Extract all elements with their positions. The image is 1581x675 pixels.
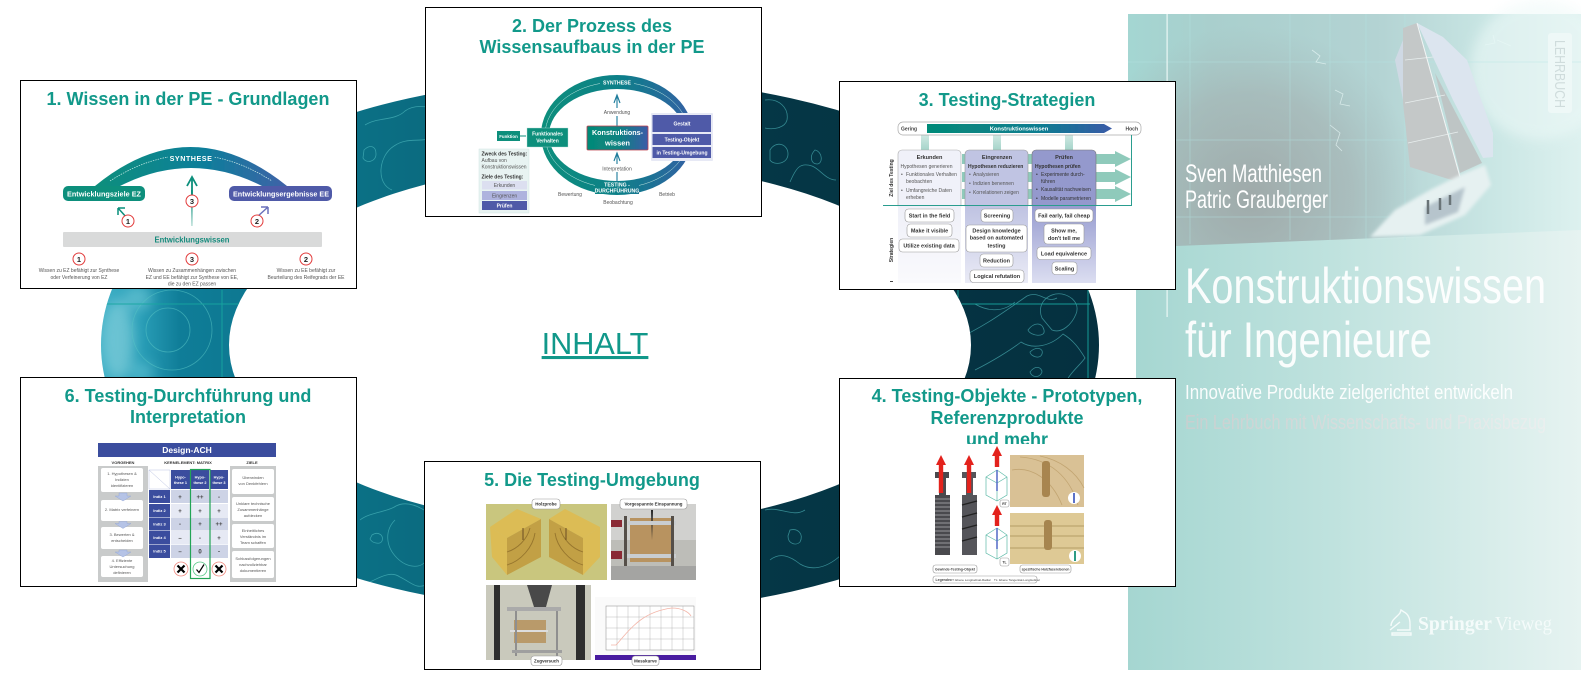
strategy pills: Make it visible (911, 228, 948, 234)
column: Prüfen: Kausalität nachweisen (1041, 187, 1091, 193)
vertical arrows (614, 95, 620, 182)
hypothesis matrix: + (178, 509, 182, 515)
left column: procedure: 2. Matrix verfeinern (105, 507, 139, 512)
right column: goals (230, 466, 276, 582)
explanatory text: oder Verfeinerung von EZ (51, 275, 107, 281)
photo: measurement curve (595, 597, 696, 660)
publisher logo (1390, 610, 1552, 635)
left column: procedure: entscheiden (111, 538, 133, 543)
column: Prüfen: • (1036, 187, 1038, 193)
box: Funktion: Funktion (499, 134, 518, 139)
panel 5: Testing-Umgebung (424, 462, 760, 670)
publisher logo: Springer (1418, 613, 1492, 635)
heading 2: 2. Der Prozess des (512, 16, 672, 36)
column: Erkunden: beobachten (906, 179, 932, 185)
book cover (1128, 0, 1581, 670)
heading 4: 4. Testing-Objekte - Prototypen, (872, 386, 1142, 406)
box: Konstruktionswissen: wissen (604, 138, 630, 148)
box EZ (63, 186, 145, 201)
strategy pills: Show me, (1051, 228, 1077, 234)
left column: procedure: 1. Hypothesen & (107, 471, 137, 476)
strategy pills: Utilize existing data (903, 244, 956, 250)
hypothesis matrix: - (218, 550, 220, 556)
legend: Prüfen (497, 204, 512, 210)
photo captions: Holzprobe (535, 502, 557, 506)
photos (486, 499, 696, 666)
image captions: RT: Ebene Longitudinal-Radial (950, 578, 991, 582)
authors: Sven Matthiesen (1185, 160, 1322, 188)
photo captions: Messkurve (634, 658, 657, 664)
column headers: ZIELE (246, 460, 258, 465)
wood photos (1010, 455, 1084, 564)
background ring (95, 70, 1105, 620)
book title: für Ingenieure (1185, 312, 1432, 368)
strategy pills: testing (987, 244, 1006, 250)
strategy pills: Logical refutation (974, 274, 1021, 280)
box: Konstruktionswissen: Konstruktions- (592, 128, 643, 137)
marker numbers: 1 (126, 217, 130, 226)
heading 6: 6. Testing-Durchführung und (65, 386, 311, 406)
axis labels (889, 159, 895, 282)
diagram: knowledge cycle: DURCHFÜHRUNG (595, 188, 639, 194)
column: Prüfen: Experimente durch- (1041, 172, 1085, 178)
hypothesis matrix: Indiz 3 (153, 522, 166, 526)
diagram: Design-ACH matrix (98, 443, 276, 582)
hypothesis matrix: Hypo- (195, 476, 206, 480)
strategy pills: don't tell me (1048, 236, 1080, 242)
box: Funktion (497, 131, 526, 141)
oval labels: SYNTHESE (603, 80, 632, 86)
explanatory text: die zu den EZ passen (168, 282, 216, 288)
column: Prüfen (1032, 150, 1096, 283)
box group: Gestalt: Gestalt (674, 122, 691, 128)
diagram: strategies (883, 122, 1141, 283)
right column: goals: von Denkfehlern (238, 481, 268, 486)
image captions: Legende: (936, 578, 951, 582)
column: Erkunden: erheben (906, 195, 925, 201)
marker numbers: 3 (190, 197, 194, 206)
heading 4: und mehr (966, 430, 1048, 450)
photo captions: Vorgespannte Einspannung (625, 502, 683, 506)
column: Eingrenzen: • (969, 172, 971, 178)
strategy pills (899, 209, 1093, 282)
box: Konstruktionswissen (587, 126, 648, 150)
box EE: Entwicklungsergebnisse EE (233, 190, 329, 198)
column: Eingrenzen: • (969, 181, 971, 187)
hypothesis matrix: + (198, 509, 202, 515)
right column: goals: Schlussfolgerungen (235, 556, 271, 561)
hypothesis matrix: ++ (215, 522, 223, 528)
heading 4 (872, 388, 1142, 444)
badge: LEHRBUCH (1548, 33, 1572, 113)
heading 5: 5. Die Testing-Umgebung (484, 470, 700, 490)
hypothesis matrix: Hypo- (175, 476, 187, 480)
explanatory text: Wissen zu EE befähigt zur (277, 268, 336, 274)
column: Eingrenzen: Hypothesen reduzieren (968, 164, 1023, 170)
right column: goals: Zusammenhänge (237, 507, 269, 512)
explanatory text: Wissen zu EZ befähigt zur Synthese (39, 268, 120, 274)
arrow labels: Interpretation (602, 166, 632, 172)
panel 1: Wissen in der PE (20, 80, 356, 288)
left column: procedure: 3. Bewerten & (109, 532, 135, 537)
photo: clamping (611, 504, 696, 580)
hypothesis matrix: – (178, 536, 182, 542)
hypothesis matrix: 0 (198, 550, 202, 556)
light water patches on ring (102, 286, 154, 382)
arrows (118, 177, 268, 226)
column: Eingrenzen (965, 150, 1028, 283)
knowledge scale (898, 122, 1141, 135)
photo: tensile test (486, 585, 591, 660)
left column: procedure: identifizieren (111, 483, 133, 488)
strategy pills: based on automated (970, 236, 1023, 242)
hypothesis matrix: - (179, 522, 181, 528)
hypothesis matrix: these 1 (174, 481, 187, 485)
box EZ: Entwicklungsziele EZ (67, 190, 141, 198)
hypothesis matrix: these 2 (193, 481, 207, 485)
explanatory text: Beurteilung des Reifegrads der EE (268, 275, 345, 281)
photo captions: Zugversuch (534, 658, 559, 664)
hypothesis matrix: + (198, 522, 202, 528)
arc label: SYNTHESE (170, 154, 212, 163)
plane tags: RT (1002, 502, 1008, 506)
photo: wood sample (486, 504, 607, 580)
box EE (229, 186, 332, 201)
box: Funktionales Verhalten: Funktionales (532, 132, 563, 138)
image captions: Gewinde-Testing-Objekt (935, 568, 976, 572)
authors (1185, 160, 1328, 214)
diagram: knowledge cycle: TESTING - (604, 182, 630, 188)
hypothesis matrix: - (218, 495, 220, 501)
strategy pills: Scaling (1055, 266, 1074, 272)
axis labels: Strategien (889, 238, 895, 262)
hypothesis matrix: ++ (196, 495, 204, 501)
diagram: knowledge cycle (479, 75, 713, 213)
left column: procedure: 4. Effiziente (112, 558, 133, 563)
cycle step labels: Betrieb (659, 192, 675, 198)
hypothesis matrix: Indiz 2 (153, 508, 166, 513)
column: Prüfen: Modelle parametrieren (1041, 196, 1091, 202)
sailboat (1370, 23, 1493, 237)
right column: goals: Team schaffen (240, 540, 266, 545)
marker numbers: 2 (255, 217, 259, 226)
force arrows (936, 446, 1002, 526)
right column: goals: nachvollziehbar (239, 562, 268, 567)
legend: Erkunden (494, 183, 515, 189)
image captions: TL: Ebene Tangential-Longitudinal (994, 578, 1040, 582)
cover photo area (1128, 0, 1581, 246)
cover lower band (1128, 14, 1581, 670)
cycle step labels: Beobachtung (603, 200, 633, 206)
left column: procedure: definieren (113, 570, 131, 575)
contour lines on ring (132, 100, 1085, 586)
cycle step labels: Bewertung (558, 192, 582, 198)
right column: goals: Einheitliches (242, 528, 264, 533)
left column: procedure (98, 466, 148, 582)
screw objects (935, 472, 977, 555)
hypothesis matrix: + (178, 495, 182, 501)
badge: LEHRBUCH: LEHRBUCH (1551, 40, 1568, 108)
knowledge scale: Konstruktionswissen (990, 126, 1049, 132)
column: Erkunden: Hypothesen generieren (900, 164, 953, 170)
image captions: spezifische Holzfaserebenen (1022, 568, 1069, 572)
box group: Gestalt: Testing-Objekt (665, 138, 700, 144)
heading 1: 1. Wissen in der PE - Grundlagen (47, 89, 329, 109)
explanatory text: EZ und EE befähigt zur Synthese von EE, (146, 275, 238, 281)
heading 6: Interpretation (130, 407, 246, 427)
verdict icons (174, 562, 226, 576)
marker numbers: 1 (77, 255, 81, 264)
legend: Aufbau von (482, 158, 507, 164)
publisher logo: Vieweg (1495, 613, 1552, 635)
strategy pills: Design knowledge (972, 228, 1021, 234)
center heading: INHALT: INHALT (542, 327, 649, 361)
column: Eingrenzen: Analysieren (973, 172, 999, 178)
panel 4: Testing-Objekte (840, 378, 1176, 586)
photo captions (531, 499, 687, 666)
horizontal arrows (962, 151, 1131, 202)
dividing lines (883, 135, 1132, 206)
knowledge scale: Gering (901, 126, 917, 132)
book title (1185, 258, 1546, 368)
column: Prüfen: Prüfen (1055, 155, 1073, 161)
arc (95, 147, 287, 186)
plane tags: TL (1002, 560, 1007, 564)
column: Prüfen: • (1036, 196, 1038, 202)
icon: knight (1390, 610, 1411, 635)
panel 2: Prozess des Wissensaufbaus (426, 8, 762, 216)
box group: Gestalt: in Testing-Umgebung (656, 150, 708, 156)
hypothesis matrix: Indiz 1 (153, 494, 166, 499)
marker numbers: 3 (190, 255, 194, 264)
authors: Patric Grauberger (1185, 186, 1328, 214)
arrow labels (600, 108, 636, 172)
column: Erkunden: • (901, 172, 903, 178)
hypothesis matrix: - (199, 536, 201, 542)
diagram: Synthese arc (39, 147, 345, 288)
cycle step labels (558, 192, 675, 206)
panel 6: Testing-Durchführung und Interpretation (20, 378, 356, 586)
legend: Zweck des Testing: (482, 152, 528, 158)
hypothesis matrix: + (217, 536, 221, 542)
explanatory text (39, 268, 345, 288)
panel 3: Testing-Strategien (840, 82, 1176, 290)
column: Erkunden: Funktionales Verhalten (906, 172, 957, 178)
legend (479, 149, 529, 213)
marker numbers (77, 197, 308, 264)
strategy pills: Reduction (983, 258, 1011, 264)
highlight: selected hypothesis (190, 470, 210, 578)
column headers: KERNELEMENT: MATRIX (164, 460, 212, 465)
oval ring (541, 75, 693, 195)
knowledge scale: Hoch (1126, 126, 1138, 132)
hypothesis matrix: – (178, 550, 182, 556)
bar: Entwicklungswissen (63, 232, 322, 247)
hypothesis matrix: Indiz 5 (153, 548, 166, 554)
heading 2 (480, 16, 704, 57)
cover white vertical line (1166, 14, 1168, 317)
strategy pills: Load equivalence (1041, 252, 1087, 258)
hypothesis matrix (149, 470, 228, 578)
plane tags (1000, 500, 1009, 566)
legend: Eingrenzen (492, 194, 517, 200)
legend: Ziele des Testing: (482, 174, 524, 180)
matrix title bar (98, 443, 276, 457)
hypothesis matrix: Indiz 4 (153, 535, 166, 540)
column: Eingrenzen: Indizien benennen (973, 181, 1014, 187)
images: test objects (933, 446, 1084, 583)
right column: goals: Überwinden (242, 475, 264, 480)
cubes (986, 470, 1007, 559)
heading 6 (65, 386, 311, 427)
hypothesis matrix: + (217, 509, 221, 515)
right column: goals: dokumentieren (240, 568, 266, 573)
column: Prüfen: Hypothesen prüfen (1035, 164, 1081, 170)
bar: Entwicklungswissen: Entwicklungswissen (154, 236, 230, 244)
left column: procedure: Indizien (115, 477, 129, 482)
legend: Konstruktionswissen (482, 164, 527, 170)
column: Erkunden (898, 150, 961, 283)
heading 4: Referenzprodukte (930, 408, 1084, 428)
strategy pills: Screening (984, 214, 1010, 220)
column: Eingrenzen: • (969, 190, 971, 196)
left column: procedure: Untersuchung (110, 564, 134, 569)
grid lines on ring (100, 285, 1090, 380)
column: Eingrenzen: Eingrenzen (982, 155, 1013, 161)
image captions (933, 565, 1071, 583)
heading 2: Wissensaufbaus in der PE (480, 37, 704, 57)
right column: goals: Unklare technische (236, 501, 271, 506)
box group: Gestalt (651, 113, 713, 161)
column: Erkunden: Erkunden (917, 155, 943, 161)
right column: goals: Verständnis im (240, 534, 267, 539)
explanatory text: Wissen zu Zusammenhängen zwischen (148, 268, 236, 274)
connectors (921, 135, 1073, 150)
box: Funktionales Verhalten: Verhalten (536, 138, 559, 144)
strategy pills: Fail early, fail cheap (1038, 214, 1091, 220)
column: Eingrenzen: Korrelationen zeigen (973, 190, 1019, 196)
column headers: VORGEHEN (112, 460, 135, 465)
column: Prüfen: führen (1041, 179, 1055, 185)
axis labels: Ziel des Testing (889, 159, 895, 197)
right column: goals: aufdecken (244, 513, 262, 518)
heading 3: 3. Testing-Strategien (919, 90, 1095, 110)
book subtitle: Innovative Produkte zielgerichtet entwickeln (1185, 382, 1513, 404)
column: Erkunden: • (901, 188, 903, 194)
box: Funktionales Verhalten (527, 128, 568, 147)
hypothesis matrix: Hypo- (214, 476, 225, 480)
hypothesis matrix: these 3 (212, 481, 226, 485)
marker numbers: 2 (304, 255, 308, 264)
arrow labels: Anwendung (604, 110, 630, 116)
matrix title bar: Design-ACH (162, 445, 212, 455)
column: Prüfen: • (1036, 172, 1038, 178)
strategy pills: Start in the field (909, 214, 950, 220)
column headers (112, 460, 258, 465)
numbered markers (73, 195, 312, 265)
column: Erkunden: Umfangreiche Daten (906, 188, 952, 194)
